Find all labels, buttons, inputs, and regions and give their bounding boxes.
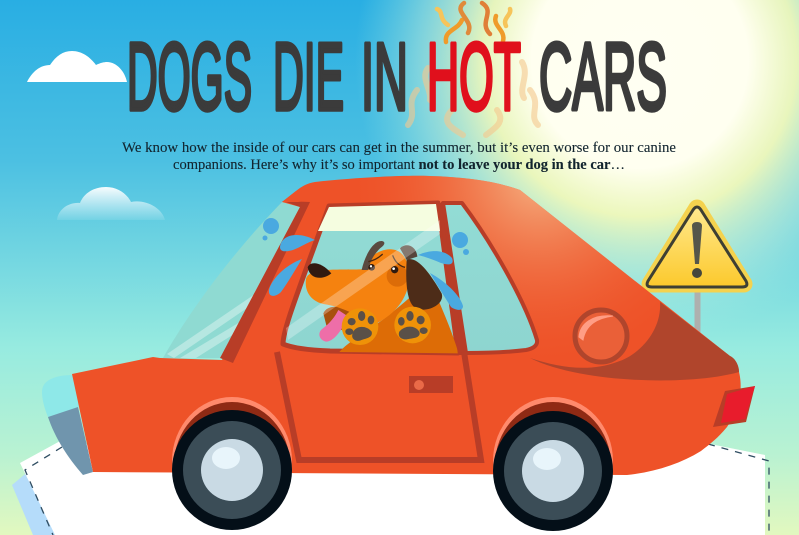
side window (283, 203, 468, 355)
intro text (122, 140, 676, 173)
rear shadow (530, 302, 739, 380)
title: DIE (273, 24, 344, 130)
intro text: We know how the inside of our cars can get in the summer, but it’s even worse for our canine (122, 140, 676, 156)
intro text: companions. Here’s why it’s so important not to leave your dog in the car… (173, 157, 625, 173)
rear window (443, 203, 537, 353)
window reflection (286, 220, 440, 340)
title: IN (361, 24, 408, 130)
door handle (409, 376, 453, 393)
paw: left (342, 308, 378, 345)
door outline (277, 352, 481, 460)
fuel cap (575, 310, 627, 362)
car body (72, 176, 741, 475)
cloud: lower left (57, 187, 165, 220)
dog (306, 241, 459, 353)
headlight (42, 375, 93, 475)
heat waves behind title (408, 3, 538, 135)
rear wheel (493, 397, 613, 531)
infographic header illustration: CARS (539, 24, 667, 130)
title: DOGS (127, 24, 252, 130)
title (127, 24, 667, 130)
cloud: top left (27, 51, 127, 82)
windshield (163, 182, 316, 363)
tears (262, 218, 469, 310)
white paper card (12, 440, 769, 535)
body highlight (300, 176, 730, 400)
car (42, 176, 755, 531)
front wheel (172, 397, 292, 530)
taillight (713, 386, 755, 427)
pillar (438, 203, 468, 355)
warning sign (647, 207, 747, 340)
paw: right (394, 307, 431, 343)
title: HOT (427, 24, 521, 130)
